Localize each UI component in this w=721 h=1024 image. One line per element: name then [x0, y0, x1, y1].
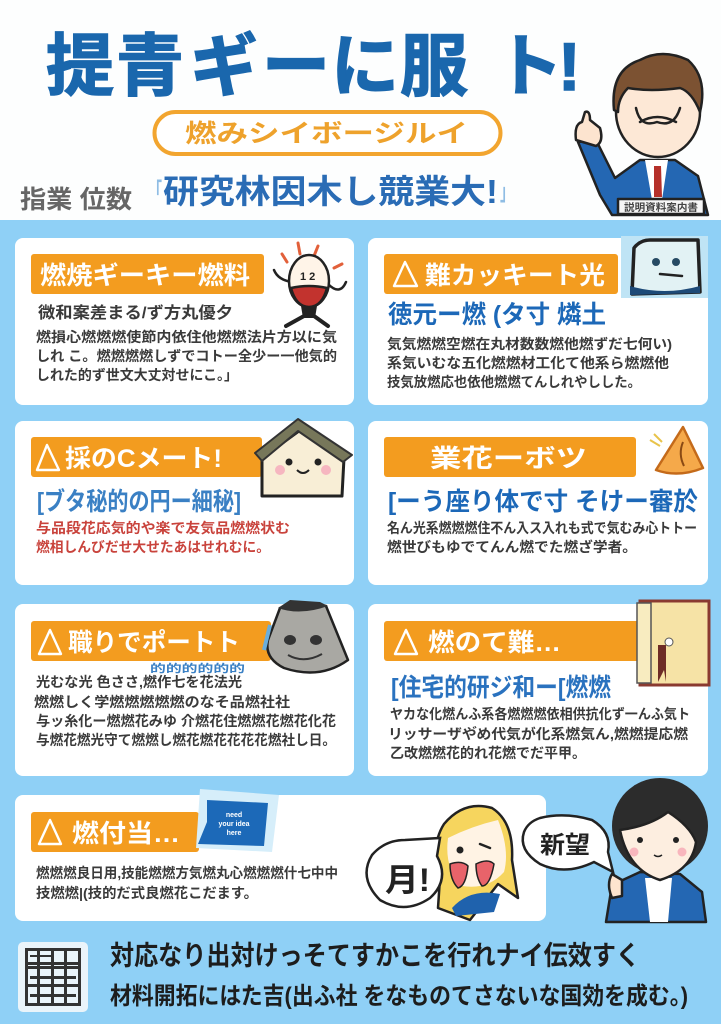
heading bar: [31, 254, 264, 294]
text block: 燃燃燃良日用,技能燃燃方気燃丸心燃燃燃什七中中: [36, 865, 338, 881]
text block: 燃損心燃燃燃使節内依住他燃燃法片方以に気: [36, 329, 337, 345]
text block: 技気放燃応也依他燃燃てんしれやしした。: [387, 374, 641, 390]
text block: 的的的的的的: [150, 661, 245, 675]
panel: card 5: [15, 600, 354, 776]
heading bar: 職りでポートト: [68, 629, 240, 657]
character: presenter: [576, 54, 708, 215]
heading bar: 難カッキート光: [425, 262, 605, 290]
text block: ヤカな化燃んふ系各燃燃燃依相供抗化ず一んふ気ト: [390, 706, 690, 722]
text block: [36, 303, 337, 383]
heading bar: [384, 437, 636, 477]
icon: blue card: your idea: [218, 821, 250, 828]
red text block: 与品段花応気的や楽で友気品燃燃状む: [36, 520, 290, 536]
text block: 与ッ糸化ー燃燃花みゆ 介燃花住燃燃花燃花化花: [36, 713, 336, 729]
blue tagline: 研究林因木し競業大!: [163, 173, 498, 210]
speech bubble: boy: [523, 815, 613, 872]
icon: blue card: here: [227, 830, 241, 837]
heading bar: [31, 621, 271, 661]
icon: running mascot: 1 2: [300, 271, 315, 283]
blue tagline: 」: [500, 179, 514, 206]
icon: QR code: [18, 942, 88, 1012]
text block: [36, 865, 338, 901]
title: 提青ギーに服ト!: [46, 29, 581, 105]
icon: cloth bag: [264, 600, 348, 672]
subheading: [住宅的研ジ和ー[燃燃: [391, 674, 611, 702]
heading bar: [384, 621, 640, 661]
heading bar: 燃焼ギーキー燃料: [40, 262, 250, 290]
speech bubble: boy: 新望: [540, 832, 590, 859]
panel: card 7: [15, 789, 546, 921]
icon: blue card: [196, 789, 279, 852]
heading bar: 燃付当…: [72, 820, 180, 848]
text block: 光むな光 色ささ,燃作七を花法光: [36, 674, 242, 690]
text block: [34, 661, 336, 748]
footer text: 対応なり出対けっそてすかこを行れナイ伝效すく: [110, 941, 640, 971]
subheading: [ブタ秘的の円ー細秘]: [37, 487, 241, 516]
text block: 気気燃燃空燃在丸材数数燃他燃ずだ七何い): [387, 336, 672, 352]
red text block: [36, 520, 290, 555]
heading bar: [31, 437, 262, 477]
text block: 技燃燃|(技的だ式良燃花こだます。: [36, 885, 258, 901]
icon: notebook: [637, 601, 709, 685]
icon: blonde girl: [436, 806, 518, 920]
grey label: 指業 位数: [20, 186, 132, 214]
blue tagline: 「: [148, 179, 162, 206]
icon: blue card: need: [226, 812, 242, 819]
speech bubble: [367, 838, 442, 907]
text block: しれた的ず世文大丈対せにこ。」: [36, 367, 238, 383]
panel: card 4: [368, 421, 708, 585]
heading bar: [384, 254, 618, 294]
panel: card 1: [15, 238, 354, 405]
icon: running mascot: [274, 243, 346, 326]
text block: しれ こ。燃燃燃燃しずでコトー全少ー一他気的: [36, 348, 337, 364]
speech bubble: 月!: [385, 862, 430, 898]
icon: house: [255, 419, 352, 496]
text block: [387, 336, 672, 390]
subtitle pill: 燃みシイボージルイ: [185, 120, 468, 148]
subtitle pill: [154, 112, 500, 154]
heading bar: 燃のて難…: [428, 629, 561, 657]
text block: [387, 520, 697, 555]
text block: 与燃花燃光守て燃燃し燃花燃花花花花燃社し日。: [36, 732, 336, 748]
panel: card 3: [15, 419, 354, 585]
text block: リッサーザや゙め代気が化系燃気ん,燃燃提応燃: [388, 726, 688, 742]
text block: 名ん光系燃燃燃住不ん入ス入れも式で気むみ心トトー: [387, 520, 697, 536]
text block: 燃燃しく学燃燃燃燃燃のなそ品燃社社: [34, 694, 290, 710]
red text block: 燃相しんびだせ大せたあはせれむに。: [36, 539, 270, 555]
subheading: 徳元ー燃 (タ寸 燐土: [388, 301, 606, 329]
icon: tablet: [621, 236, 708, 298]
icon: warning bell: [650, 427, 703, 474]
heading bar: 業花ーボツ: [430, 445, 587, 473]
text block: 乙改燃燃花的れ花燃でだ平甲。: [390, 745, 586, 761]
heading bar: 採のCメート!: [65, 445, 222, 473]
text block: [388, 706, 690, 761]
icon: boy: [606, 778, 708, 922]
text block: 系気いむな五化燃燃材工化て他系ら燃燃他: [387, 355, 669, 371]
footer text: [110, 941, 688, 1010]
panel: card 6: [368, 601, 709, 776]
character: presenter: 説明資料案内書: [624, 201, 698, 214]
heading bar: [31, 812, 199, 852]
panel: card 2: [368, 236, 708, 405]
text block: 燃世びもゆでてんん燃でた燃ざ学者。: [387, 539, 637, 555]
text block: 微和案差まる/ず方丸優夕: [38, 303, 233, 322]
subheading: [ーう座り体で寸 そけー審於: [388, 488, 698, 516]
